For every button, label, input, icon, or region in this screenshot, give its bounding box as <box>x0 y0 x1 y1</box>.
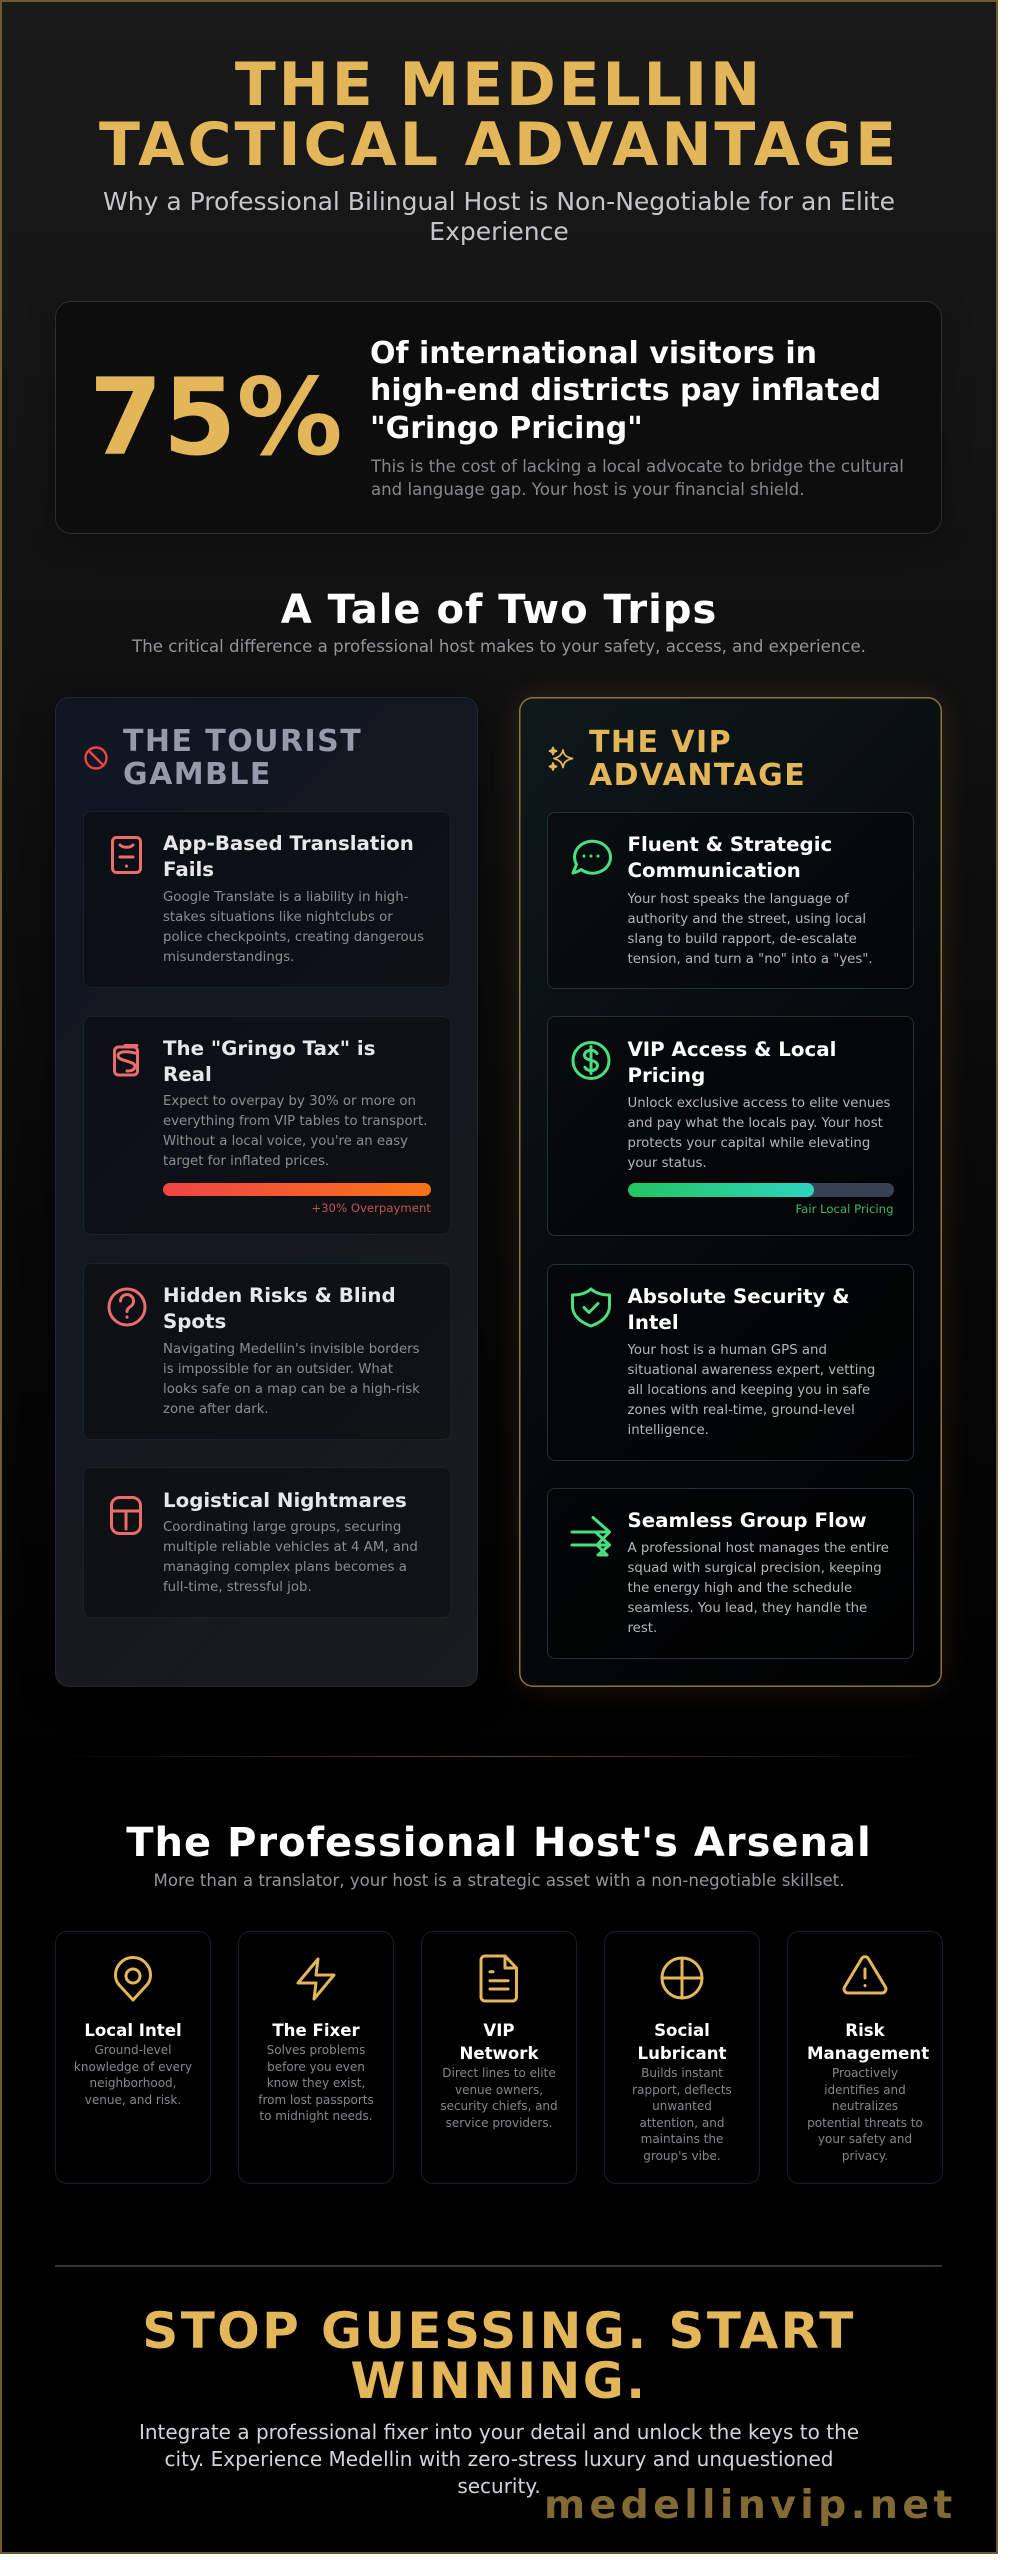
subtitle <box>103 187 895 246</box>
tile text: security chiefs, and <box>440 2099 558 2113</box>
card text: Your host speaks the language of <box>628 892 849 907</box>
card title: VIP Access & Local <box>628 1038 836 1061</box>
tile title: VIP <box>483 2021 515 2040</box>
card text: Without a local voice, you're an easy <box>163 1134 408 1149</box>
card text: everything from VIP tables to transport. <box>163 1114 428 1129</box>
tile title: Social <box>654 2021 710 2040</box>
icon: map pin <box>114 1956 152 2002</box>
card title <box>163 832 414 881</box>
card text: zone after dark. <box>163 1402 269 1417</box>
card text: target for inflated prices. <box>163 1154 329 1169</box>
card text: seamless. You lead, they handle the <box>628 1601 867 1616</box>
subtitle: Experience <box>429 217 569 246</box>
statistic heading: high-end districts pay inflated <box>370 373 881 408</box>
section heading: A Tale of Two Trips: A Tale of Two Trips <box>281 587 717 633</box>
card text <box>163 1094 428 1169</box>
tile text: your safety and <box>818 2132 912 2146</box>
card text: Coordinating large groups, securing <box>163 1520 401 1535</box>
card title: Hidden Risks & Blind <box>163 1284 396 1307</box>
card text: intelligence. <box>628 1423 709 1438</box>
card text: Navigating Medellin's invisible borders <box>163 1342 420 1357</box>
heading: the tourist gamble <box>123 724 362 792</box>
tile text: attention, and <box>640 2116 724 2130</box>
card text <box>163 890 424 965</box>
icon: circle cross <box>660 1956 704 2000</box>
call to action heading <box>0 2306 998 2406</box>
fair pricing label: Fair Local Pricing <box>796 1202 894 1216</box>
card text <box>628 1541 889 1636</box>
divider <box>55 2265 942 2267</box>
card title: Real <box>163 1063 212 1086</box>
call to action heading: STOP GUESSING. START <box>142 2302 856 2360</box>
card title <box>628 833 832 882</box>
card title: Fails <box>163 858 214 881</box>
card text <box>628 892 873 967</box>
statistic description: This is the cost of lacking a local advocate to bridge the cultural <box>371 456 904 476</box>
card: fluent communication <box>547 812 914 989</box>
card title <box>163 1284 396 1333</box>
card text: all locations and keeping you in safe <box>628 1383 870 1398</box>
tile: the fixer <box>238 1931 394 2184</box>
tile title <box>459 2021 539 2063</box>
call to action text: city. Experience Medellin with zero-stress luxury and unquestioned <box>165 2447 833 2471</box>
card title: The "Gringo Tax" is <box>163 1037 375 1060</box>
icon: lightning bolt <box>296 1958 336 2000</box>
card text: Your host is a human GPS and <box>628 1343 827 1358</box>
panel: the tourist gamble <box>55 697 478 1687</box>
card text: Unlock exclusive access to elite venues <box>628 1096 890 1111</box>
heading: the VIP advantage <box>589 725 806 793</box>
tile text <box>74 2043 192 2107</box>
card text <box>628 1343 875 1438</box>
card text: the energy high and the schedule <box>628 1581 852 1596</box>
title <box>99 50 899 180</box>
card: hidden risks <box>83 1263 451 1440</box>
card text: slang to build rapport, de-escalate <box>628 932 857 947</box>
tile text: group's vibe. <box>643 2149 721 2163</box>
title: TACTICAL ADVANTAGE <box>99 110 899 180</box>
call to action text: security. <box>457 2474 541 2498</box>
tile title <box>807 2019 923 2065</box>
tile title: Network <box>459 2044 539 2063</box>
tile text: potential threats to <box>807 2116 923 2130</box>
card title: Absolute Security & <box>628 1285 849 1308</box>
tile text: maintains the <box>641 2132 723 2146</box>
tile text: Solves problems <box>267 2043 365 2057</box>
tile text: before you even <box>267 2060 365 2074</box>
call to action heading: WINNING. <box>350 2352 648 2410</box>
card text: multiple reliable vehicles at 4 AM, and <box>163 1540 418 1555</box>
icon: van <box>110 1496 142 1535</box>
card title: Spots <box>163 1310 226 1333</box>
overpayment label: +30% Overpayment <box>311 1201 431 1215</box>
icon: warning triangle <box>841 1955 889 2003</box>
statistic description <box>370 456 904 499</box>
call to action text <box>0 2419 998 2500</box>
tile: social lubricant <box>604 1931 760 2184</box>
tile text: unwanted <box>652 2099 712 2113</box>
card text: stakes situations like nightclubs or <box>163 910 393 925</box>
tile text: identifies and <box>824 2083 906 2097</box>
tile text: Proactively <box>832 2066 898 2080</box>
card text <box>163 1342 420 1417</box>
statistic description: and language gap. Your host is your financial shield. <box>371 480 805 499</box>
divider <box>55 1756 942 1757</box>
tile text: rapport, deflects <box>632 2083 732 2097</box>
tile text: neutralizes <box>832 2099 898 2113</box>
title: THE MEDELLIN <box>235 50 763 120</box>
icon: wallet with S <box>113 1044 139 1076</box>
tile title: The Fixer <box>272 2021 360 2040</box>
tile text <box>787 2065 943 2165</box>
card title: Communication <box>628 859 801 882</box>
section subheading: arsenal: More than a translator, your host is a strategic asset with a non-negotiable skillset. <box>154 1871 844 1890</box>
card text <box>163 1520 418 1595</box>
card: app-based translation fails <box>83 811 451 988</box>
tile text: venue owners, <box>455 2083 543 2097</box>
heading: the tourist gamble: THE TOURIST <box>123 724 362 758</box>
icon: phone <box>111 836 142 874</box>
tile text: Direct lines to elite <box>442 2066 556 2080</box>
card title: App-Based Translation <box>163 832 414 855</box>
card: logistical nightmares <box>83 1467 451 1618</box>
card text <box>628 1096 890 1171</box>
bar fill 70% <box>628 1183 814 1197</box>
heading: the VIP advantage: ADVANTAGE <box>589 758 806 793</box>
card title: Pricing <box>628 1064 705 1087</box>
icon: document <box>480 1954 518 2002</box>
card text: authority and the street, using local <box>628 912 866 927</box>
tile text <box>258 2043 374 2123</box>
card text: your status. <box>628 1156 707 1171</box>
tile text: knowledge of every <box>74 2060 192 2074</box>
call to action text: Integrate a professional fixer into your detail and unlock the keys to the <box>139 2420 859 2444</box>
card text: squad with surgical precision, keeping <box>628 1561 882 1576</box>
card text: tension, and turn a "no" into a "yes". <box>628 952 873 967</box>
tile text: to midnight needs. <box>259 2109 373 2123</box>
card: absolute security <box>547 1264 914 1461</box>
card title: Fluent & Strategic <box>628 833 832 856</box>
statistic heading <box>370 336 881 446</box>
tile text: Ground-level <box>94 2043 172 2057</box>
icon: shield check <box>571 1287 611 1328</box>
icon: flow arrows <box>570 1516 612 1557</box>
fair pricing bar <box>628 1183 894 1197</box>
icon: ban <box>84 746 108 770</box>
card text: situational awareness expert, vetting <box>628 1363 875 1378</box>
card text: Expect to overpay by 30% or more on <box>163 1094 416 1109</box>
tile: local intel <box>55 1931 211 2184</box>
tile text: venue, and risk. <box>85 2093 181 2107</box>
tile text: from lost passports <box>258 2093 374 2107</box>
card: gringo tax <box>83 1016 451 1235</box>
card text: managing complex plans becomes a <box>163 1560 407 1575</box>
card title <box>628 1285 849 1334</box>
card: VIP access and local pricing <box>547 1016 914 1236</box>
tile title <box>638 2021 726 2063</box>
overpayment bar <box>163 1182 431 1196</box>
card title: Intel <box>628 1311 679 1334</box>
icon: chat bubble <box>572 840 612 875</box>
section subheading: The critical difference a professional host makes to your safety, access, and experience. <box>132 637 866 656</box>
watermark: medellinvip.net: medellinvip.net <box>544 2482 957 2528</box>
tile text: service providers. <box>446 2116 552 2130</box>
tile text <box>632 2066 732 2163</box>
tile text: Builds instant <box>641 2066 723 2080</box>
tile text: privacy. <box>842 2149 888 2163</box>
icon: question mark <box>108 1288 146 1326</box>
tile title: Risk <box>845 2021 885 2040</box>
card text: is impossible for an outsider. What <box>163 1362 393 1377</box>
statistic heading: Of international visitors in <box>370 336 817 371</box>
tile: VIP network <box>421 1931 577 2184</box>
tile: risk management <box>787 1931 943 2184</box>
card text: Google Translate is a liability in high- <box>163 890 408 905</box>
statistic heading: "Gringo Pricing" <box>370 411 643 446</box>
card text: full-time, stressful job. <box>163 1580 312 1595</box>
section heading: arsenal: The Professional Host's Arsenal <box>126 1820 872 1866</box>
tile title: Local Intel <box>84 2021 182 2040</box>
card text: protects your capital while elevating <box>628 1136 870 1151</box>
card text: misunderstandings. <box>163 950 294 965</box>
heading: the VIP advantage: THE VIP <box>589 725 732 760</box>
big number 75%: 75% <box>89 356 343 479</box>
tile title: Management <box>807 2044 929 2063</box>
subtitle: Why a Professional Bilingual Host is Non-Negotiable for an Elite <box>103 187 895 216</box>
tile text <box>440 2066 558 2130</box>
card text: looks safe on a map can be a high-risk <box>163 1382 420 1397</box>
card title <box>628 1038 836 1087</box>
card text: A professional host manages the entire <box>628 1541 889 1556</box>
card title <box>163 1037 375 1086</box>
tile text: know they exist, <box>267 2076 365 2090</box>
tile text: neighborhood, <box>90 2076 176 2090</box>
heading: the tourist gamble: GAMBLE <box>123 756 272 792</box>
panel: the VIP advantage <box>519 697 942 1687</box>
card text: rest. <box>628 1621 657 1636</box>
card text: and pay what the locals pay. Your host <box>628 1116 883 1131</box>
card text: police checkpoints, creating dangerous <box>163 930 424 945</box>
card text: zones with real-time, ground-level <box>628 1403 855 1418</box>
icon: dollar <box>572 1041 610 1080</box>
card: seamless group flow <box>547 1488 914 1659</box>
card title: Seamless Group Flow <box>628 1509 867 1532</box>
panel: 75 percent statistic <box>55 301 942 534</box>
icon: sparkles <box>548 746 574 771</box>
card title: Logistical Nightmares <box>163 1489 407 1512</box>
tile title: Lubricant <box>638 2044 726 2063</box>
